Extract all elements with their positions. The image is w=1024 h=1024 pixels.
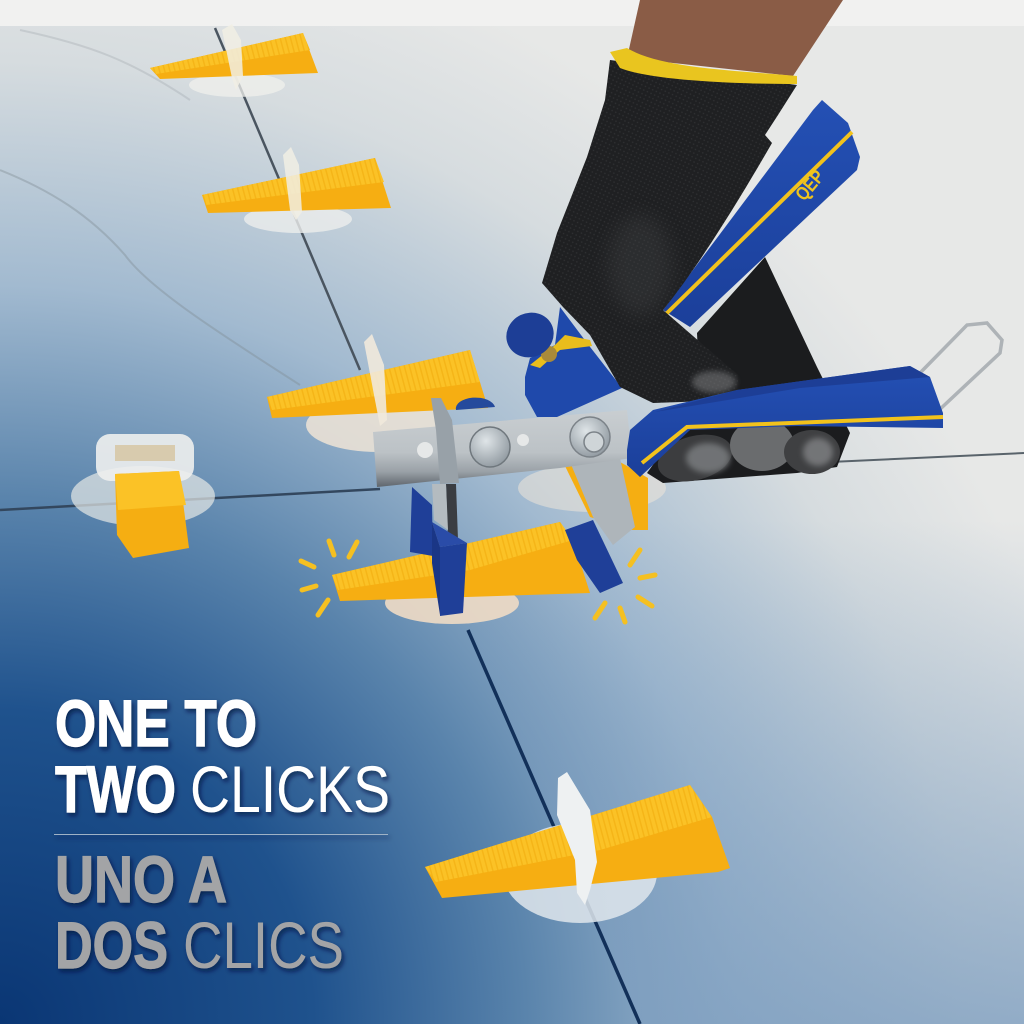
wedge clip: second far (202, 147, 391, 233)
english heading: TWO (55, 752, 176, 826)
click spark marks (301, 541, 655, 622)
wedge clip: top far (150, 24, 318, 97)
spanish heading: UNO A (55, 842, 227, 916)
black glove (542, 48, 797, 403)
headline text (54, 686, 390, 982)
tool: vertical bracket (431, 398, 459, 540)
tool: upper handle (663, 100, 860, 327)
english heading (55, 686, 390, 826)
divider (54, 834, 388, 835)
english heading: ONE TO (55, 686, 257, 760)
loose clip with wedge (71, 434, 215, 558)
spanish heading (55, 842, 344, 982)
glove: back fingers (647, 257, 850, 483)
wedge clip: foreground (425, 772, 730, 923)
english heading: CLICKS (190, 752, 390, 826)
spanish heading: CLICS (183, 908, 344, 982)
spanish heading: DOS (55, 908, 168, 982)
tool: steel leg (570, 458, 635, 545)
back wedge and disc under tool (518, 462, 666, 530)
glove: dusty fingertips (653, 419, 840, 489)
tool: steel bar with bolts (373, 398, 632, 487)
tool: blue jaws (410, 487, 623, 616)
tool: blue body and knob (499, 305, 622, 417)
glove yellow cuff (610, 48, 797, 84)
wedge clip: middle (267, 334, 488, 452)
central wedge under tool (332, 522, 590, 624)
handle logo: QEP (792, 166, 829, 205)
tool: lower handle with wire loop (627, 323, 1002, 477)
wrist (627, 0, 843, 76)
